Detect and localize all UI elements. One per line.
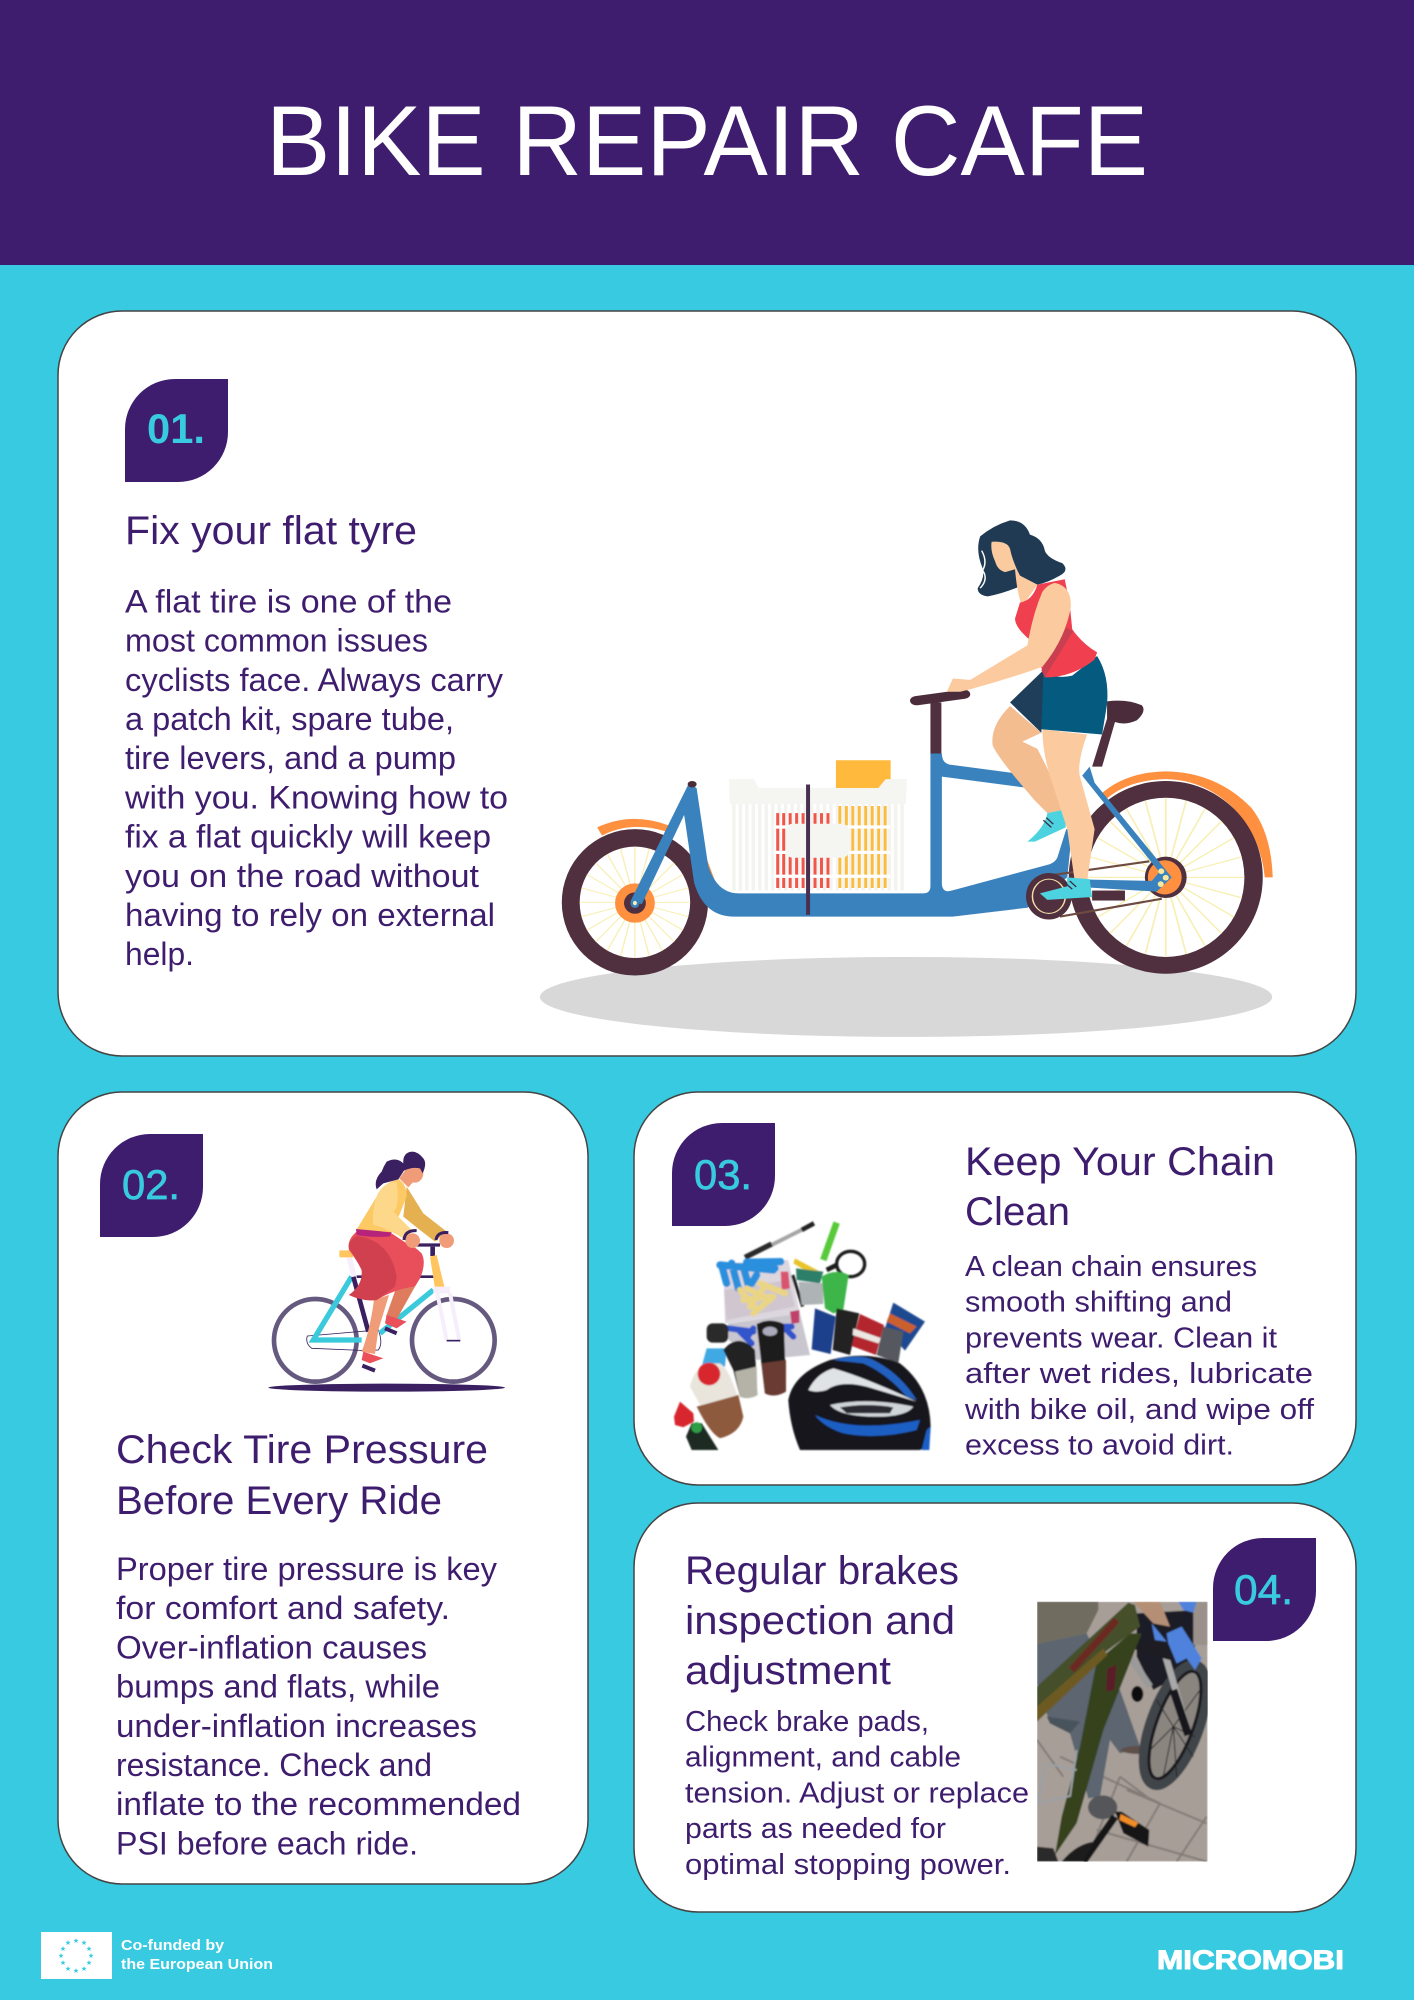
body text 03	[964, 1251, 1315, 1462]
heading 04	[685, 1549, 959, 1693]
body text 04: optimal stopping power.	[685, 1849, 1011, 1881]
body text 04	[685, 1706, 1029, 1881]
body text 02: under-inflation increases	[116, 1708, 477, 1744]
EU stars: ★	[58, 1952, 64, 1960]
heading 02	[116, 1428, 488, 1523]
body text 03: with bike oil, and wipe off	[964, 1394, 1315, 1426]
heading 02: Before Every Ride	[116, 1479, 442, 1523]
EU stars: ★	[88, 1952, 94, 1960]
illustration: woman riding cargo bike	[540, 520, 1273, 1037]
badge 01: 01.	[147, 405, 205, 452]
body text 01: having to rely on external	[125, 897, 495, 933]
heading 03: Keep Your Chain	[965, 1140, 1275, 1184]
badge 02: 02.	[122, 1161, 180, 1208]
heading 04: inspection and	[685, 1599, 955, 1643]
body text 03: excess to avoid dirt.	[965, 1430, 1234, 1462]
heading 04: Regular brakes	[685, 1549, 959, 1593]
EU funding text: the European Union	[121, 1957, 273, 1973]
EU stars: ★	[86, 1945, 92, 1953]
ground line	[268, 1384, 505, 1392]
cargo bike frame	[630, 753, 1172, 917]
photo: mechanic holding bicycle	[1037, 1602, 1219, 1862]
body text 01: you on the road without	[125, 858, 479, 894]
body text 03: smooth shifting and	[965, 1287, 1232, 1319]
ground shadow	[540, 957, 1272, 1037]
body text 01: tire levers, and a pump	[125, 740, 456, 776]
title: BIKE REPAIR CAFE	[266, 85, 1148, 196]
EU stars: ★	[60, 1945, 66, 1953]
heading 03	[965, 1140, 1275, 1234]
panel: 02 check tire pressure	[58, 1092, 588, 1884]
EU funding text: Co-funded by	[121, 1938, 224, 1954]
heading 01: Fix your flat tyre	[125, 509, 417, 553]
body text 01: with you. Knowing how to	[124, 779, 508, 815]
EU stars: ★	[60, 1959, 66, 1967]
EU stars: ★	[81, 1965, 87, 1973]
body text 04: Check brake pads,	[685, 1706, 929, 1738]
chain and crank	[1026, 861, 1162, 919]
body text 01: A flat tire is one of the	[125, 583, 452, 619]
body text 02: Proper tire pressure is key	[116, 1551, 497, 1587]
badge 03	[672, 1123, 775, 1226]
rear wheel	[1069, 771, 1273, 974]
body text 03: A clean chain ensures	[965, 1251, 1257, 1283]
body text 02: bumps and flats, while	[116, 1669, 440, 1705]
heading 03: Clean	[965, 1190, 1070, 1234]
body text 01: most common issues	[125, 623, 428, 659]
basket with crate	[729, 760, 907, 891]
panel: 01 fix your flat tyre	[58, 311, 1356, 1056]
panel: 04 regular brakes inspection	[634, 1503, 1356, 1912]
EU funding text	[121, 1938, 273, 1973]
panel: 03 keep your chain clean	[634, 1092, 1356, 1485]
body text 03: prevents wear. Clean it	[965, 1322, 1277, 1354]
body text 02: for comfort and safety.	[116, 1590, 450, 1626]
badge 02	[100, 1134, 203, 1237]
illustration: woman on bicycle	[268, 1152, 505, 1392]
body text 02: Over-inflation causes	[116, 1629, 427, 1665]
EU stars: ★	[73, 1937, 79, 1945]
badge 03: 03.	[694, 1151, 752, 1198]
body text 02: resistance. Check and	[116, 1747, 432, 1783]
body text 02	[116, 1551, 521, 1861]
logo: co-funded by the European Union	[41, 1932, 273, 1979]
body text 01: cyclists face. Always carry	[125, 662, 503, 698]
rider	[947, 520, 1107, 900]
EU stars: ★	[81, 1939, 87, 1947]
badge 04	[1213, 1538, 1316, 1641]
header banner	[0, 0, 1414, 265]
body text 04: alignment, and cable	[685, 1742, 961, 1774]
body text 03: after wet rides, lubricate	[965, 1358, 1313, 1390]
heading 04: adjustment	[685, 1649, 891, 1693]
body text 01	[124, 583, 508, 972]
photo: repair tools and helmet	[674, 1223, 931, 1450]
body text 02: inflate to the recommended	[116, 1786, 521, 1822]
body text 04: parts as needed for	[685, 1813, 946, 1845]
seat and handlebar	[917, 694, 1144, 767]
EU stars: ★	[65, 1939, 71, 1947]
bicycle	[274, 1245, 495, 1382]
EU stars: ★	[86, 1959, 92, 1967]
badge 04: 04.	[1234, 1566, 1293, 1613]
cyclist	[349, 1152, 454, 1371]
front wheel	[562, 819, 715, 976]
body text 01: fix a flat quickly will keep	[125, 819, 491, 855]
badge 01	[125, 379, 228, 482]
body text 02: PSI before each ride.	[116, 1825, 418, 1861]
body text 04: tension. Adjust or replace	[685, 1777, 1029, 1809]
EU stars: ★	[73, 1967, 79, 1975]
body text 01: help.	[125, 936, 194, 972]
heading 02: Check Tire Pressure	[116, 1428, 488, 1472]
logo: micromobi: MICROMOBI	[1157, 1945, 1344, 1975]
EU stars: ★	[65, 1965, 71, 1973]
body text 01: a patch kit, spare tube,	[125, 701, 454, 737]
